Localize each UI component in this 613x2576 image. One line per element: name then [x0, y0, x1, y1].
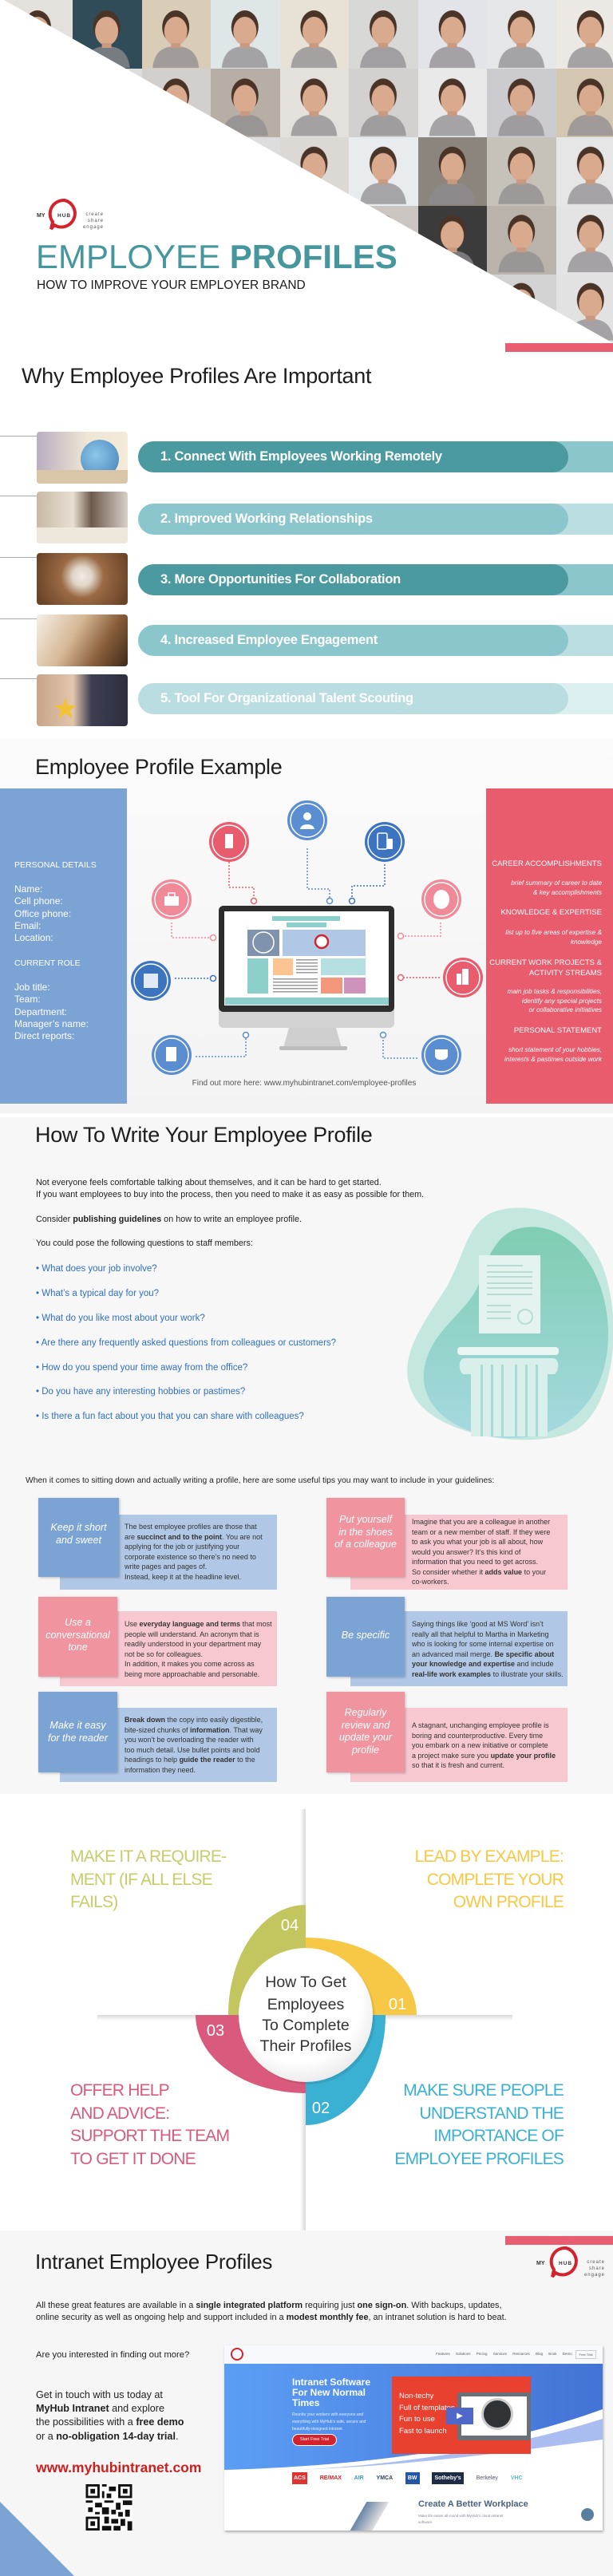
screenshot: myhub website: Start Free Trial — [300, 2437, 329, 2442]
panel: career details: CAREER ACCOMPLISHMENTS — [492, 859, 602, 868]
tip card: review profile: update your — [339, 1732, 392, 1743]
panel: personal details: PERSONAL DETAILS — [14, 860, 97, 870]
logo: MyHub right: MY — [536, 2261, 545, 2266]
tip card: be specific: Saying things like ‘good at MS Word’ isn’t — [412, 1620, 544, 1628]
bar 3: 3. More Opportunities For Collaboration — [160, 572, 401, 587]
section background: profile example — [0, 738, 613, 1113]
panel: career details: interests & pastimes outside work — [504, 1055, 602, 1063]
screenshot: myhub website: Create A Better Workplace — [418, 2499, 528, 2509]
tip card: easy for reader — [38, 1692, 277, 1782]
text block: intro — [36, 1178, 424, 1199]
thumb: meeting — [37, 492, 128, 543]
icon: qr code — [131, 961, 171, 1001]
screenshot: myhub website: Reunite your workers with everyone and — [292, 2412, 363, 2417]
logo: MyHub: share — [88, 219, 104, 223]
screenshot: myhub website: Free Trial — [579, 2353, 592, 2357]
step text: 03: AND ADVICE: — [70, 2104, 169, 2123]
panel: career details: & key accomplishments — [533, 889, 602, 895]
icon: buildings — [443, 958, 483, 998]
screenshot: myhub website: Intranet Software — [292, 2376, 370, 2388]
tip card: review profile: review and — [342, 1719, 390, 1730]
header photo grid — [4, 0, 613, 343]
step text: 02 — [394, 2081, 564, 2167]
text block: interested: Are you interested in finding out more? — [36, 2350, 189, 2360]
thumb: star: ★ — [53, 692, 78, 725]
icon: certificate — [209, 822, 249, 862]
step text: 03: SUPPORT THE TEAM — [70, 2127, 229, 2145]
tip card: conversational tone: conversational — [45, 1630, 110, 1641]
tip card: easy for reader: you won’t be overloading the reader with — [125, 1736, 254, 1744]
screenshot: myhub website: Full of templates — [399, 2404, 455, 2412]
logo: MyHub: HUB — [57, 213, 71, 219]
logo: MyHub right: share — [589, 2266, 605, 2271]
tip card: easy for reader: Break down the copy into easily digestible, — [125, 1716, 263, 1724]
logo: MyHub: create — [85, 212, 104, 217]
tip card: review profile: a project make sure you update your profile — [412, 1751, 556, 1759]
tip card: keep it short: Keep it short — [50, 1522, 107, 1533]
tip card: keep it short: applying for the job or justifying your — [125, 1543, 239, 1551]
step text: 03: TO GET IT DONE — [70, 2150, 196, 2167]
screenshot: myhub website: Features Solutions Pricing Services Resources Blog Book Demo — [436, 2352, 572, 2356]
text block: guidelines: Consider publishing guidelines on how to write an employee profile. — [36, 1215, 302, 1224]
screenshot: myhub website: For New Normal — [292, 2387, 366, 2398]
text block: intro: If you want employees to buy into the process, then you need to make it as easy as possible for them. — [36, 1190, 424, 1199]
panel: career details: PERSONAL STATEMENT — [514, 1026, 602, 1035]
logo: MyHub: MY — [37, 213, 45, 219]
tip card: conversational tone: people will understand. An acronym that is — [125, 1630, 259, 1638]
panel: career details: short statement of your hobbies, — [508, 1046, 602, 1053]
thumb: puzzle — [37, 553, 128, 605]
tip card: keep it short: write pages and pages of. — [125, 1563, 207, 1570]
tip card: review profile — [326, 1692, 568, 1782]
step text: 02: UNDERSTAND THE — [419, 2104, 564, 2123]
url: www.myhubintranet.com — [36, 2459, 201, 2475]
list: questions: • What do you like most about your work? — [36, 1314, 205, 1323]
step text: 01: OWN PROFILE — [453, 1893, 564, 1911]
step text: 01: COMPLETE YOUR — [427, 1871, 564, 1888]
center circle: Employees — [267, 1996, 344, 2013]
thumb: globe — [37, 432, 128, 484]
list: questions: • Do you have any interesting hobbies or pastimes? — [36, 1387, 245, 1397]
step text: 04 — [70, 1847, 227, 1911]
heading: profile example: Employee Profile Example — [35, 755, 282, 779]
tip card: keep it short: Instead, keep it at the headline level. — [125, 1572, 241, 1580]
text block: platform: online security as well as ongoing help and support included in a modest monthly fee, an intranet solution is hard to beat. — [36, 2313, 507, 2322]
icon: mask — [421, 1035, 461, 1075]
panel: personal details: Email: — [14, 920, 41, 931]
panel: personal details: CURRENT ROLE — [14, 958, 81, 968]
tip card: conversational tone: not be so for colleagues. — [125, 1650, 203, 1658]
tip card: put yourself in shoes — [326, 1497, 568, 1590]
tip card: easy for reader: headings to help guide the reader to the — [125, 1756, 255, 1764]
text block: platform: All these great features are available in a single integrated platform requiring just one sign-on. With backups, updates, — [36, 2301, 502, 2310]
tip card: put yourself in shoes: Put yourself — [339, 1514, 392, 1525]
tip card: review profile: so that it is fresh and current. — [412, 1761, 504, 1769]
panel: career details: KNOWLEDGE & EXPERTISE — [500, 908, 602, 917]
center circle: Their Profiles — [260, 2037, 352, 2055]
tip card: be specific — [326, 1596, 568, 1686]
list: reasons — [0, 432, 613, 726]
screenshot: myhub website: software. — [418, 2520, 433, 2524]
screenshot: myhub website: Times — [292, 2397, 319, 2408]
list: questions: • What does your job involve? — [36, 1264, 157, 1274]
tip card: review profile: Regularly — [345, 1707, 386, 1718]
list: questions — [36, 1264, 336, 1421]
tip card: be specific: who is looking for some internal expertise on — [412, 1640, 554, 1648]
tip card: be specific: really all that helpful to Martha in Marketing — [412, 1630, 549, 1638]
icon: brain — [421, 879, 461, 919]
bar 4 — [138, 625, 613, 656]
panel: personal details: Team: — [14, 994, 41, 1005]
step text: 03 — [70, 2081, 229, 2167]
tip card: conversational tone: readily understood in your department may — [125, 1640, 261, 1648]
panel: personal details — [0, 788, 127, 1104]
logo: MyHub: engage — [83, 225, 104, 230]
segment 03 — [196, 2015, 306, 2093]
icon: devices — [365, 822, 405, 862]
tip card: easy for reader: bite-sized chunks of information. That way — [125, 1725, 263, 1733]
thumb: star — [37, 674, 128, 726]
pink accent bar 2 — [505, 2236, 613, 2245]
tip card: keep it short — [38, 1497, 277, 1590]
step text: 04: FAILS) — [70, 1893, 117, 1911]
bar 4: 4. Increased Employee Engagement — [160, 633, 378, 647]
segment 02 — [306, 2015, 386, 2125]
icon: briefcase — [152, 879, 192, 919]
heading: how to write: How To Write Your Employee Profile — [35, 1123, 373, 1147]
list: questions: • Is there a fun fact about you that you can share with colleagues? — [36, 1412, 304, 1421]
bar 3 — [138, 564, 613, 595]
tip card: put yourself in shoes: co-workers. — [412, 1578, 449, 1586]
panel: career details: CURRENT WORK PROJECTS & — [489, 958, 602, 967]
panel: career details: ACTIVITY STREAMS — [529, 969, 602, 978]
tip card: review profile: boring and counterproductive. Every time — [412, 1732, 543, 1740]
illustration: document on pillar — [407, 1207, 613, 1440]
tip card: put yourself in shoes: in the shoes — [338, 1526, 393, 1537]
subtitle: HOW TO IMPROVE YOUR EMPLOYER BRAND — [37, 279, 306, 292]
panel: personal details: Office phone: — [14, 908, 71, 919]
text block: questions intro: You could pose the following questions to staff members: — [36, 1239, 253, 1248]
tip card: put yourself in shoes: team or a new member of staff. If they were — [412, 1527, 550, 1535]
panel: career details: list up to five areas of expertise & — [505, 929, 602, 936]
step text: 04: MENT (IF ALL ELSE — [70, 1871, 212, 1888]
title: EMPLOYEE PROFILES — [36, 238, 397, 275]
step text: 04: MAKE IT A REQUIRE- — [70, 1847, 226, 1866]
tip card: keep it short: The best employee profiles are those that — [125, 1523, 257, 1531]
tip card: keep it short: and sweet — [56, 1534, 101, 1545]
decorative blue triangle — [0, 2502, 74, 2576]
chart: four steps pinwheel — [97, 1809, 512, 2230]
tip card: put yourself in shoes: information that you need to get across. — [412, 1558, 538, 1566]
bar 5: 5. Tool For Organizational Talent Scouting — [160, 691, 413, 705]
panel: career details — [486, 788, 613, 1104]
tip card: conversational tone: In addition, it makes you come across as — [125, 1660, 255, 1668]
center circle: To Complete — [262, 2017, 350, 2034]
screenshot: myhub website: Fast to launch — [399, 2426, 447, 2436]
screenshot: myhub website: ACS RE/MAX AIR YMCA BW Sotheby’s Berkeley VHC — [294, 2475, 523, 2481]
tip card: put yourself in shoes: So consider whether it adds value to your — [412, 1567, 546, 1575]
segment 01 — [306, 1938, 417, 2015]
center circle — [239, 1948, 375, 2084]
bar 1 — [138, 441, 613, 472]
tip card: be specific: your knowledge and expertise and include — [412, 1660, 554, 1668]
logo: MyHub — [37, 199, 104, 230]
section background: how to write — [0, 1117, 613, 1794]
tip card: be specific: Be specific — [342, 1630, 390, 1641]
text block: contact: Get in touch with us today at — [36, 2389, 163, 2400]
list: questions: • How do you spend your time away from the office? — [36, 1363, 247, 1373]
segment 01: 01 — [389, 1996, 406, 2013]
center circle: How To Get — [265, 1973, 346, 1991]
tip card: conversational tone — [38, 1596, 277, 1686]
tip card: keep it short: are succinct and to the point. You are not — [125, 1532, 263, 1540]
tip card: conversational tone: being more approachable and personable. — [125, 1669, 259, 1677]
screenshot: myhub website: Non-techy — [399, 2392, 433, 2400]
chart: profile monitor diagram — [131, 800, 483, 1088]
icon: monitor — [219, 906, 394, 1050]
icon: person — [287, 800, 327, 840]
step text: 03: OFFER HELP — [70, 2081, 169, 2100]
bar 1: 1. Connect With Employees Working Remotely — [160, 449, 442, 464]
tip card: put yourself in shoes: of a colleague — [334, 1539, 397, 1550]
tip card: conversational tone: Use everyday language and terms that most — [125, 1620, 272, 1628]
pink accent bar — [505, 343, 613, 352]
logo: MyHub right: engage — [584, 2273, 605, 2278]
list: questions: • Are there any frequently asked questions from colleagues or customers? — [36, 1338, 336, 1348]
heading: why important: Why Employee Profiles Are Important — [22, 364, 371, 388]
list: questions: • What’s a typical day for you? — [36, 1289, 159, 1298]
tip card: easy for reader: too much detail. Use bullet points and bold — [125, 1746, 260, 1754]
panel: personal details: Direct reports: — [14, 1030, 74, 1041]
thumb: paper people — [37, 614, 128, 666]
logo: MyHub right: HUB — [559, 2261, 572, 2266]
qr code — [86, 2484, 132, 2531]
connectors — [172, 848, 441, 1058]
tip card: be specific: an advanced mail merge. Be specific about — [412, 1650, 554, 1658]
text block: intro: Not everyone feels comfortable talking about themselves, and it can be hard to get started. — [36, 1178, 382, 1187]
tip card: conversational tone: Use a — [65, 1617, 91, 1628]
logo: MyHub right — [536, 2246, 605, 2278]
step text: 02: MAKE SURE PEOPLE — [403, 2081, 564, 2100]
panel: career details: knowledge — [571, 938, 602, 945]
segment 03: 03 — [207, 2022, 224, 2040]
tip card: review profile: A stagnant, unchanging employee profile is — [412, 1721, 549, 1729]
tip card: conversational tone: tone — [68, 1642, 88, 1653]
screenshot: myhub website: Fun to use — [399, 2415, 435, 2424]
tip card: easy for reader: information they need. — [125, 1765, 196, 1773]
bar 2: 2. Improved Working Relationships — [160, 512, 373, 526]
panel: personal details: Department: — [14, 1006, 67, 1017]
caption link: Find out more here: www.myhubintranet.com/employee-profiles — [192, 1079, 416, 1088]
tip card: review profile: you embark on a new initiative or complete — [412, 1741, 548, 1749]
text block: contact: or a no-obligation 14-day trial. — [36, 2431, 178, 2442]
step text: 01 — [415, 1847, 564, 1911]
icon: document — [152, 1035, 192, 1075]
panel: personal details: Name: — [14, 883, 42, 895]
text block: contact — [36, 2389, 184, 2442]
tip card: keep it short: corporate existence so there’s no need to — [125, 1553, 256, 1561]
panel: personal details: Job title: — [14, 982, 50, 993]
segment 04: 04 — [281, 1917, 299, 1934]
screenshot: myhub website: beautifully-designed intranet. — [292, 2427, 343, 2432]
text block: tips intro: When it comes to sitting down and actually writing a profile, here are some useful tips you may want to include in your guidelines: — [26, 1476, 494, 1485]
heading: intranet: Intranet Employee Profiles — [35, 2250, 272, 2274]
text block: contact: MyHub Intranet and explore — [36, 2403, 164, 2414]
section background: intranet — [0, 2230, 613, 2576]
logo: MyHub right: create — [587, 2260, 605, 2265]
tip card: put yourself in shoes: to ask you what your job is all about, how — [412, 1538, 543, 1546]
text block: platform — [36, 2301, 507, 2322]
segment 04 — [228, 1905, 306, 2015]
tip card: be specific: real-life work examples to illustrate your skills. — [412, 1669, 564, 1677]
panel: personal details: Location: — [14, 932, 53, 943]
step text: 02: EMPLOYEE PROFILES — [394, 2150, 564, 2167]
panel: career details: brief summary of career to date — [511, 879, 602, 887]
tip card: review profile: profile — [352, 1744, 379, 1756]
screenshot: myhub website — [224, 2345, 603, 2531]
step text: 01: LEAD BY EXAMPLE: — [415, 1847, 564, 1866]
tip card: put yourself in shoes: Imagine that you are a colleague in another — [412, 1518, 550, 1526]
screenshot: myhub website: everything with MyHub’s safe, secure and — [292, 2420, 366, 2424]
tip card: easy for reader: for the reader — [48, 1732, 108, 1743]
panel: career details: identify any special projects — [522, 998, 602, 1004]
screenshot: myhub website: Make life easier all-round with MyHub’s cloud intranet — [418, 2514, 503, 2518]
bar 5 — [138, 683, 613, 714]
tip card: easy for reader: Make it easy — [49, 1720, 106, 1731]
text block: contact: the possibilities with a free demo — [36, 2416, 184, 2428]
step text: 02: IMPORTANCE OF — [433, 2127, 564, 2145]
screenshot: myhub website: ▶ — [457, 2412, 463, 2420]
segment 02: 02 — [312, 2100, 330, 2117]
panel: career details: or collaborative initiatives — [529, 1006, 602, 1013]
panel: personal details: Cell phone: — [14, 895, 63, 907]
panel: personal details: Manager’s name: — [14, 1018, 89, 1029]
panel: career details: main job tasks & responsibilities, — [508, 988, 602, 995]
bar 2 — [138, 504, 613, 535]
tip card: put yourself in shoes: would you answer? It’s this kind of — [412, 1548, 520, 1556]
